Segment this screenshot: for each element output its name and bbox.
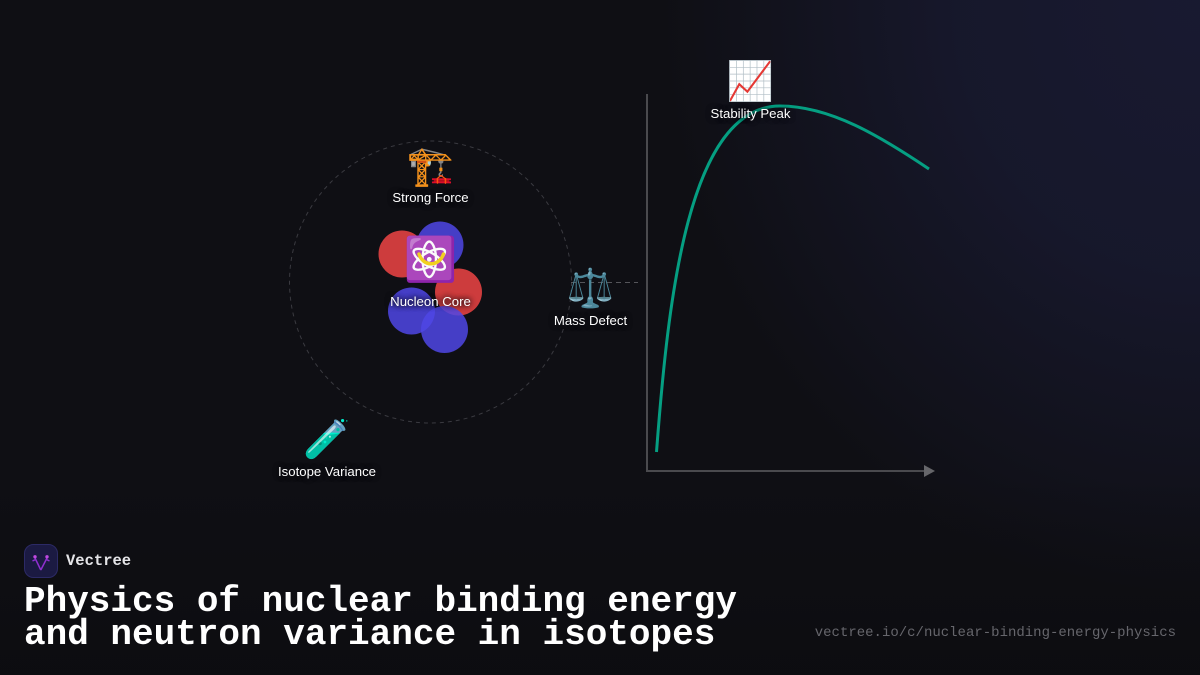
logo: Vectree [24, 544, 131, 578]
node: Isotope Variance: Isotope Variance [278, 464, 376, 479]
binding energy curve [656, 106, 929, 452]
node: Stability Peak [711, 60, 791, 123]
chart axes [646, 94, 935, 477]
connector: mass defect to chart [571, 282, 638, 284]
node: Isotope Variance [278, 418, 376, 479]
node: Mass Defect: ⚖️ [567, 267, 614, 311]
node: Strong Force: 🏗️ [407, 144, 454, 188]
brand name: Vectree [66, 552, 131, 570]
node: Nucleon Core: ⚛️ [404, 235, 457, 285]
orbit ring [290, 141, 572, 423]
node: Stability Peak: 📈 [727, 60, 774, 104]
node: Nucleon Core [388, 235, 474, 311]
node: Mass Defect [554, 267, 628, 328]
nucleon cluster [378, 222, 482, 353]
node: Mass Defect: Mass Defect [554, 313, 627, 328]
node: Isotope Variance: 🧪 [303, 418, 351, 462]
icon: tree logo [24, 544, 58, 578]
node: Strong Force: Strong Force [392, 190, 469, 204]
node: Nucleon Core: Nucleon Core [390, 294, 471, 309]
title: and neutron variance in isotopes [24, 614, 715, 655]
node: Strong Force [392, 144, 469, 204]
source url: vectree.io/c/nuclear-binding-energy-physics [815, 625, 1176, 641]
title: Physics of nuclear binding energy [24, 581, 737, 622]
node: Stability Peak: Stability Peak [711, 106, 790, 121]
title [24, 581, 737, 655]
